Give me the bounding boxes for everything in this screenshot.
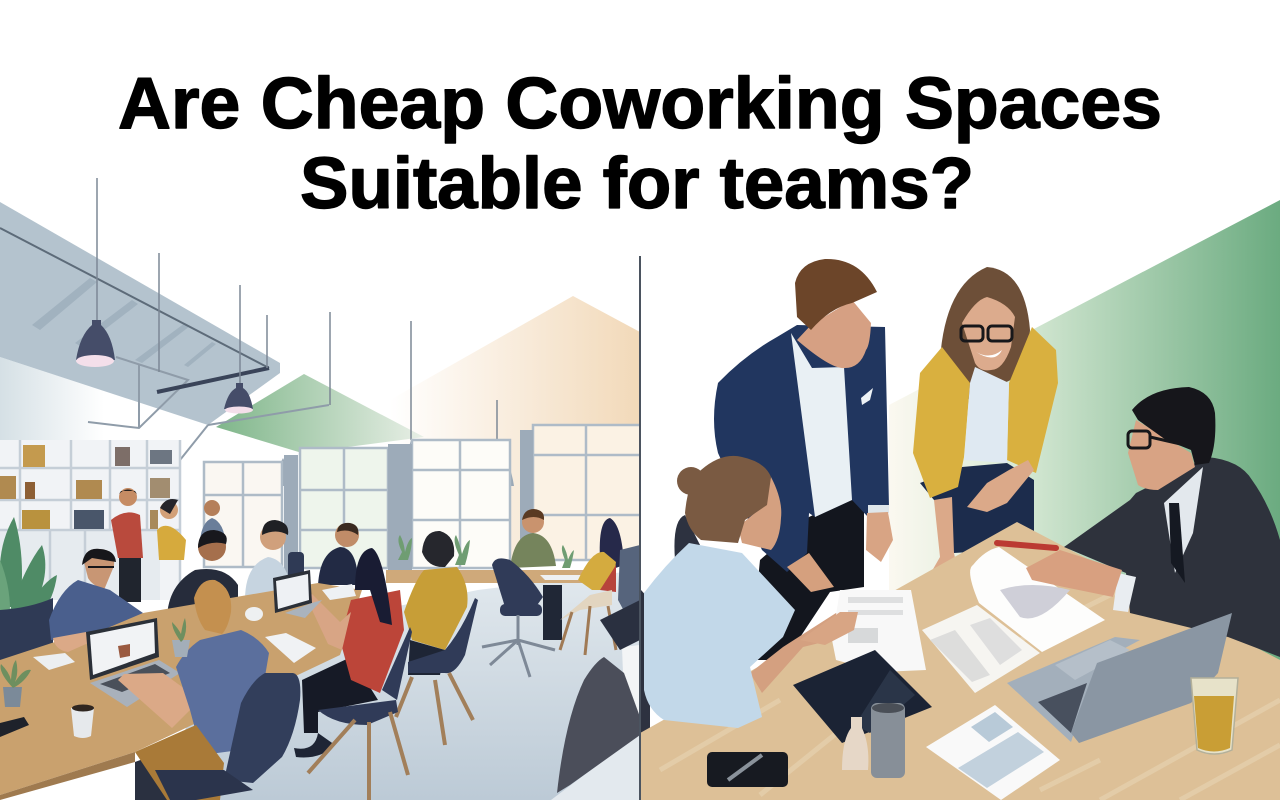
bookshelf	[0, 440, 180, 600]
ceiling	[0, 202, 329, 460]
title: Are Cheap Coworking Spaces	[118, 64, 1162, 144]
laptop on big table	[273, 570, 322, 618]
under table dark	[135, 760, 167, 800]
title	[118, 64, 1162, 224]
green wall shape	[216, 374, 424, 453]
wall beneath ceiling	[0, 357, 84, 440]
laptop front	[86, 618, 180, 707]
standing people at back	[111, 488, 226, 602]
big table	[0, 583, 362, 795]
plant chair	[0, 598, 53, 660]
bottle	[842, 717, 868, 770]
wood grain	[660, 590, 1280, 800]
mug	[871, 703, 905, 778]
windows	[204, 425, 643, 568]
desk items	[0, 618, 190, 738]
man in yellow sweater	[396, 531, 478, 745]
man in blue shirt	[49, 549, 143, 652]
back table	[386, 535, 584, 640]
floor	[150, 570, 640, 800]
table front edge	[0, 752, 135, 800]
drinking glass	[1191, 678, 1238, 754]
tablet	[793, 650, 932, 743]
seated people at back	[167, 509, 640, 655]
laptop	[1007, 613, 1232, 743]
pendant lamps	[76, 178, 514, 488]
bench and jacket	[551, 600, 640, 800]
woman in red top	[294, 548, 412, 800]
office chair	[482, 558, 555, 677]
woman in yellow blazer	[913, 267, 1058, 569]
plant: large left	[0, 517, 57, 612]
title: Suitable for teams?	[300, 144, 974, 224]
seated man in dark suit	[997, 387, 1280, 657]
panel: cheap coworking space	[0, 178, 643, 800]
seated woman's chair	[641, 515, 700, 735]
panel: team collaboration	[640, 200, 1280, 800]
loose paper	[818, 590, 926, 672]
window pillars	[284, 430, 533, 575]
open book	[922, 547, 1105, 693]
green wall shape	[889, 200, 1280, 660]
divider	[639, 256, 641, 800]
document on table	[926, 705, 1060, 800]
papers on big table	[245, 584, 356, 663]
table	[640, 522, 1280, 800]
man in blue t-shirt, seen from behind	[118, 580, 300, 800]
seated woman	[644, 456, 856, 728]
phone	[707, 752, 788, 787]
man in navy blazer	[714, 259, 893, 660]
peach wall shape	[419, 296, 639, 560]
